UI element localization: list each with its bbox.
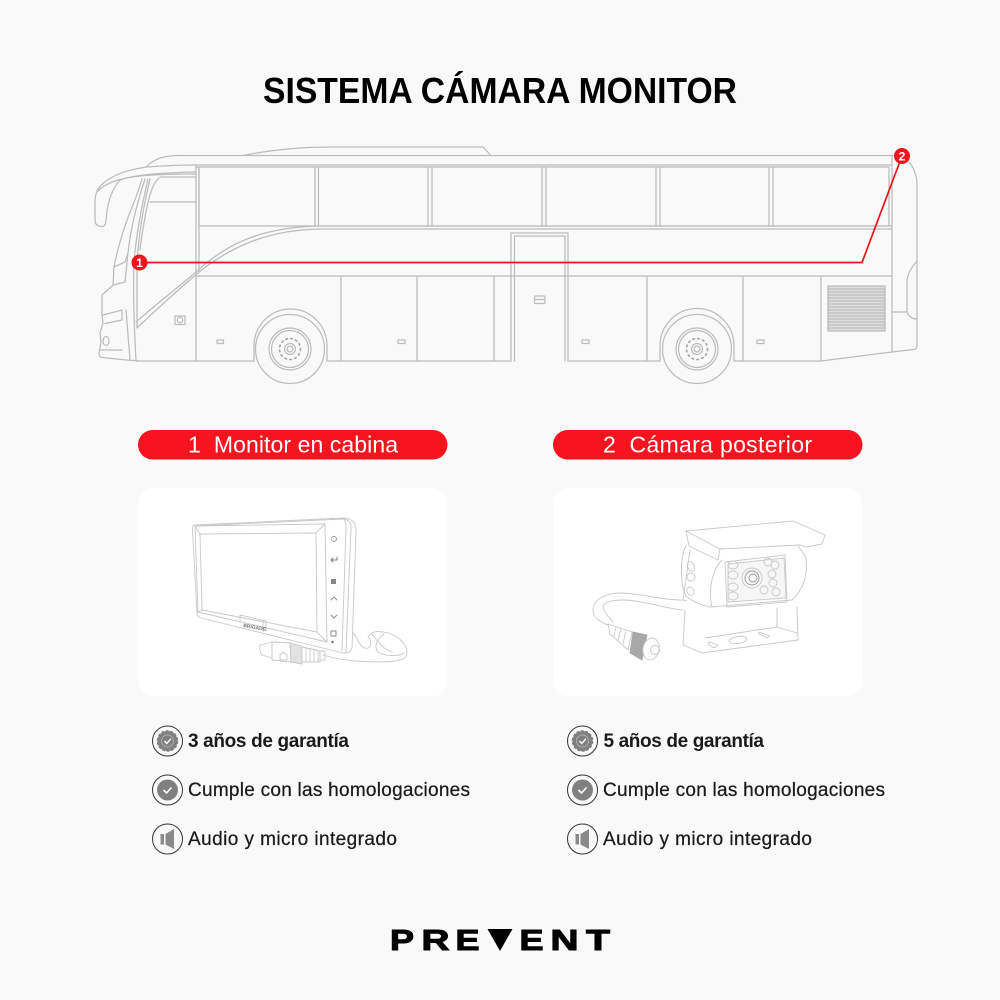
front wheel [254,309,327,384]
warranty item: 5 años de garantía [604,731,764,752]
homologation item [568,775,885,805]
warranty item: 3 años de garantía [188,731,349,752]
logo: PREVENT: P [390,925,414,957]
camera illustration [593,521,825,661]
audio item: Audio y micro integrado [603,829,812,850]
features: left column [152,726,470,854]
marker 1 [132,254,148,270]
red cable route [140,156,902,262]
icon: warranty badge [152,726,182,756]
logo: PREVENT [390,925,610,957]
marker 1: 1 [136,256,143,270]
homologation item: Cumple con las homologaciones [603,780,885,801]
icon: warranty badge [568,726,598,756]
panel: camera [553,488,862,696]
rear wheel [660,308,734,384]
marker 2 [894,148,910,164]
marker 2: 2 [899,150,906,164]
icon: speaker [568,824,598,854]
cab front [99,179,142,360]
bus diagram [95,147,917,384]
title: SISTEMA CÁMARA MONITOR [263,70,737,111]
pill: cámara posterior: 2 Cámara posterior [603,432,812,458]
icon: check [568,775,598,805]
mirror and roof edge [95,165,196,226]
pill: cámara posterior [553,430,862,460]
homologation item: Cumple con las homologaciones [188,780,470,801]
panel: monitor [138,488,448,696]
logo: PREVENT: R [422,925,450,957]
logo: PREVENT: E [520,925,544,957]
warranty item [152,726,349,756]
logo: PREVENT: E [456,925,480,957]
pill: monitor en cabina: 1 Monitor en cabina [188,432,398,458]
monitor illustration [192,518,407,664]
monitor illustration: BRIGADE [243,623,267,633]
features: right column [568,726,885,854]
grille [828,286,885,331]
logo: PREVENT: T [586,925,610,957]
homologation item [152,775,470,805]
icon: check [152,775,182,805]
audio item: Audio y micro integrado [188,829,397,850]
audio item [568,824,812,854]
audio item [152,824,397,854]
icon: speaker [152,824,182,854]
logo: PREVENT: N [550,925,578,957]
pill: monitor en cabina [138,430,448,460]
bus outline [95,147,917,384]
warranty item [568,726,764,756]
